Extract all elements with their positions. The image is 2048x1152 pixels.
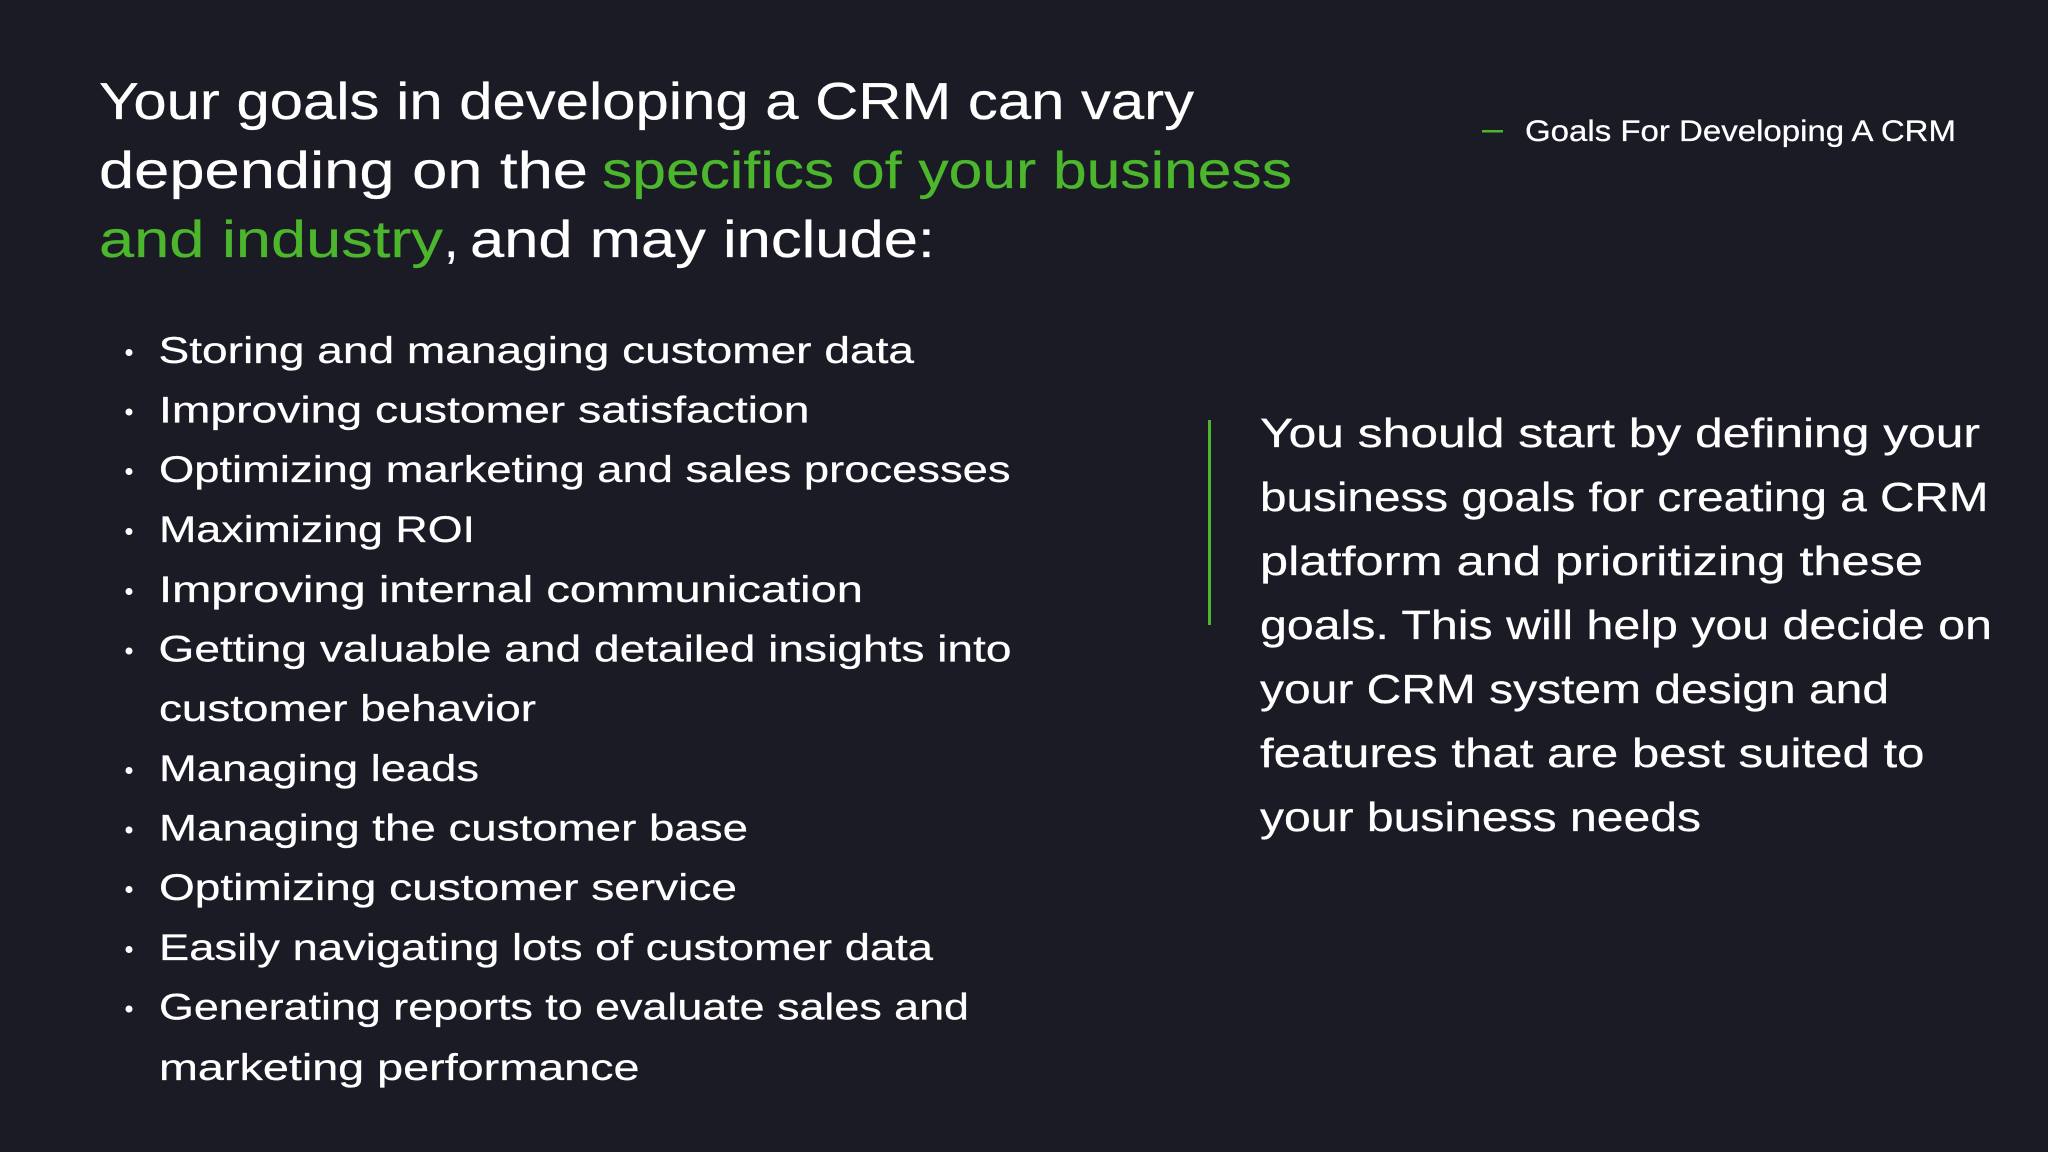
bullet list of CRM goals: Optimizing marketing and sales processes — [159, 449, 1010, 490]
bullet list of CRM goals: Optimizing customer service — [159, 867, 737, 908]
title: goals heading: depending on the — [99, 142, 588, 200]
bullet list of CRM goals: Managing leads — [159, 748, 479, 789]
section label: Goals For Developing A CRM: Goals For Developing A CRM — [1525, 115, 1956, 148]
bullet list of CRM goals: Storing and managing customer data — [158, 330, 915, 371]
green vertical accent bar — [1208, 420, 1211, 625]
title: goals heading: and may include: — [470, 211, 935, 269]
title: goals heading: specifics of your business — [602, 142, 1292, 200]
bullet list of CRM goals: Maximizing ROI — [159, 509, 475, 550]
text block: advice on defining goals: business goals for creating a CRM — [1260, 474, 1988, 520]
title: goals heading: and industry — [99, 211, 443, 269]
text block: advice on defining goals: your business needs — [1260, 794, 1701, 840]
text block: advice on defining goals: features that are best suited to — [1260, 730, 1924, 776]
bullet list of CRM goals: Easily navigating lots of customer data — [159, 927, 934, 968]
bullet list of CRM goals: Improving customer satisfaction — [159, 390, 810, 430]
bullet list of CRM goals: Managing the customer base — [159, 808, 748, 848]
bullet list of CRM goals — [126, 330, 1012, 1088]
text block: advice on defining goals: your CRM system design and — [1260, 666, 1889, 712]
text block: advice on defining goals: goals. This will help you decide on — [1260, 602, 1992, 648]
text block: advice on defining goals: platform and prioritizing these — [1260, 538, 1923, 584]
bullet list of CRM goals: Getting valuable and detailed insights into — [158, 628, 1012, 670]
bullet list of CRM goals: Generating reports to evaluate sales and — [159, 986, 969, 1028]
bullet list of CRM goals: marketing performance — [159, 1047, 640, 1088]
text block: advice on defining goals: You should start by defining your — [1260, 410, 1980, 456]
title: goals heading: , — [444, 211, 458, 269]
bullet list of CRM goals: customer behavior — [159, 688, 536, 729]
bullet list of CRM goals: Improving internal communication — [159, 569, 863, 610]
text block: advice on defining goals — [1260, 410, 1992, 840]
title: goals heading — [99, 73, 1292, 269]
title: goals heading: Your goals in developing a CRM can vary — [99, 73, 1194, 131]
